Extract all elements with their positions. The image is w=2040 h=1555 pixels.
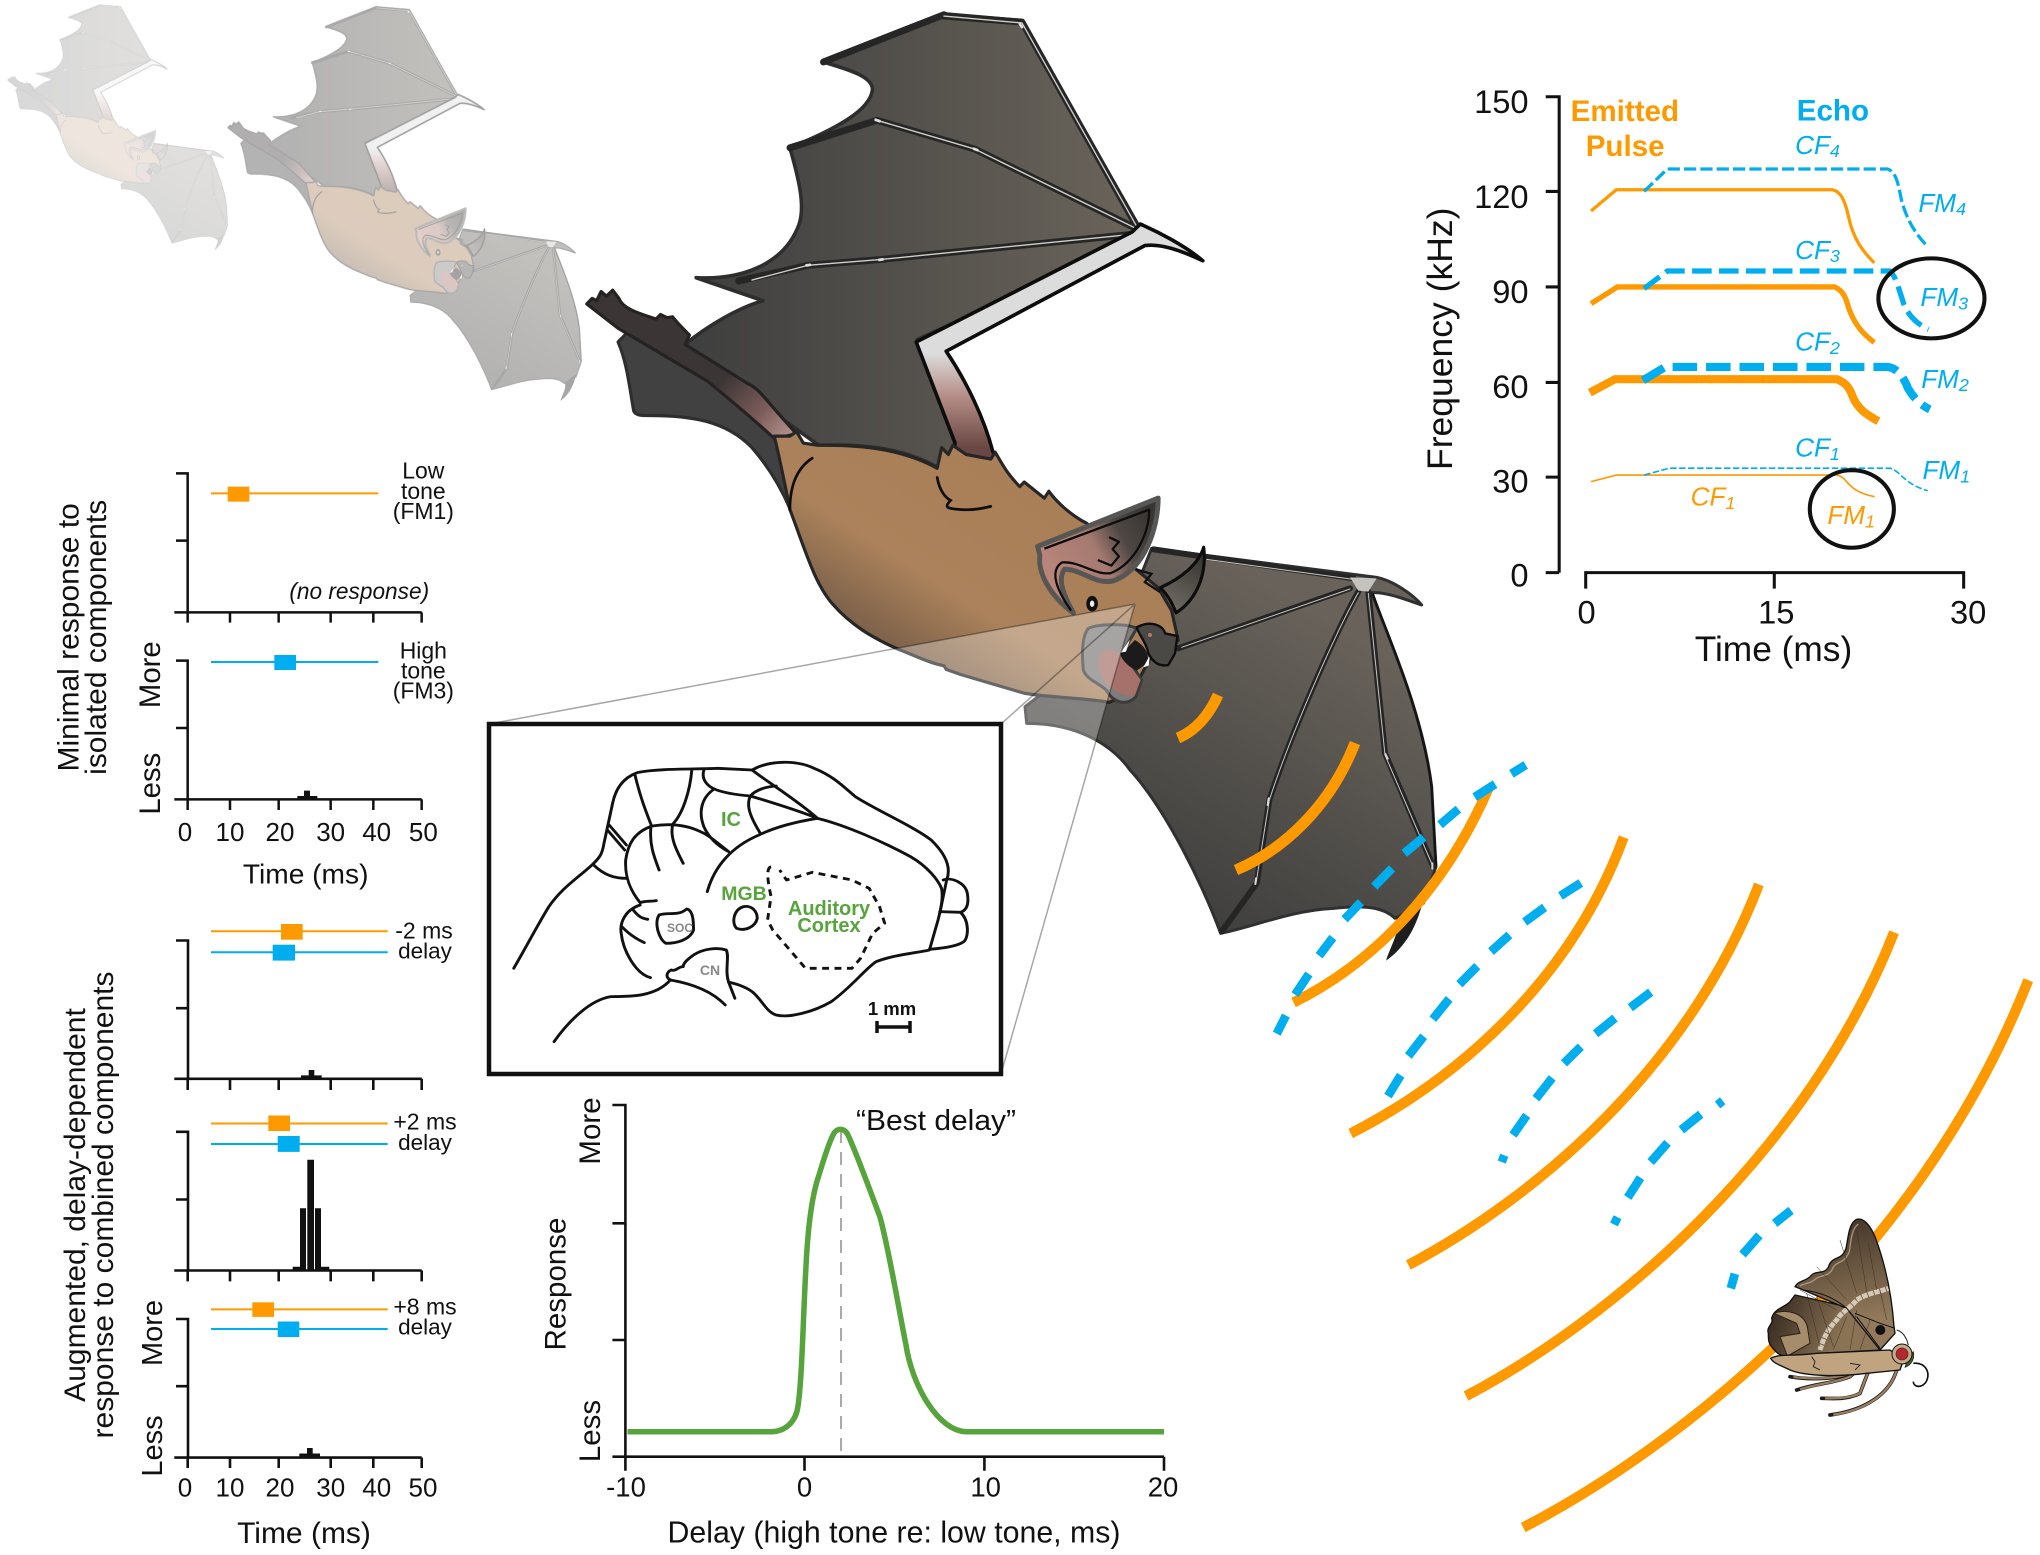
tuning tick labels: 10 <box>970 1472 1001 1503</box>
raster: +8 ms delay <box>137 1293 457 1477</box>
brain inset panel: Cortex <box>797 915 861 937</box>
scale bar <box>868 998 916 1033</box>
echo wavefronts <box>1277 765 1791 1288</box>
moth hindwing <box>1768 1295 1880 1357</box>
time axis labels: 10 <box>216 817 244 847</box>
harmonic labels: CF <box>1795 327 1830 357</box>
y tick labels: 0 <box>1510 557 1529 594</box>
panel: augmented delay-dependent response <box>59 917 457 1550</box>
tuning axis titles: Delay (high tone re: low tone, ms) <box>668 1517 1120 1550</box>
main bat illustration <box>587 14 1436 961</box>
panel: best delay tuning curve <box>540 1097 1178 1550</box>
time axis labels: 30 <box>316 817 345 847</box>
raster: low tone: (no response) <box>289 578 429 604</box>
scale bar: 1 mm <box>868 998 916 1019</box>
mouth and nose <box>1082 624 1177 702</box>
harmonic labels: 2 <box>1958 375 1969 395</box>
moth proboscis <box>1913 1363 1928 1386</box>
tuning axes <box>612 1105 1164 1471</box>
lower wing <box>1025 548 1436 961</box>
tuning tick labels: 20 <box>1148 1472 1178 1503</box>
raster: -2 ms delay <box>174 917 453 1090</box>
raster: high tone: Less <box>134 753 167 815</box>
harmonic labels: 1 <box>1830 444 1840 464</box>
harmonic labels: CF <box>1691 482 1725 512</box>
raster: low tone <box>174 457 454 623</box>
panel title: Augmented, delay-dependent <box>59 1008 92 1402</box>
harmonic labels: 3 <box>1958 293 1968 313</box>
time axis labels: 0 <box>178 817 192 847</box>
brain inset panel: CN <box>700 962 720 978</box>
time axis labels: Time (ms) <box>237 1517 371 1550</box>
upper wing and body <box>587 14 1204 702</box>
y tick labels: 90 <box>1492 273 1529 310</box>
raster: +8 ms delay: +8 ms <box>393 1293 457 1319</box>
x tick labels: 30 <box>1950 593 1986 630</box>
body <box>774 432 1178 702</box>
chart axes <box>1546 97 1964 589</box>
emitted pulse wavefronts <box>1178 695 2028 1527</box>
best delay label: “Best delay” <box>856 1105 1016 1137</box>
tuning axis titles <box>540 1097 1120 1550</box>
panel: minimal response to isolated components <box>52 457 454 889</box>
fur tuft <box>1136 569 1160 592</box>
raster: low tone: Low <box>402 457 445 483</box>
raster: high tone: tone <box>401 657 446 683</box>
raster: +8 ms delay: More <box>137 1300 169 1366</box>
harmonic labels: FM <box>1922 455 1960 485</box>
brain inset panel: SOC <box>667 921 693 935</box>
harmonic labels: 1 <box>1960 466 1970 486</box>
raster: high tone: More <box>134 641 167 708</box>
x tick labels <box>1577 593 1986 630</box>
time axis labels: 30 <box>316 1472 345 1502</box>
brain labels: IC <box>721 809 741 831</box>
x axis title: Time (ms) <box>1695 630 1852 669</box>
raster: +2 ms delay: +2 ms <box>393 1109 457 1135</box>
time axis labels: 10 <box>216 1472 244 1502</box>
tuning tick labels: 0 <box>797 1472 812 1503</box>
harmonic labels <box>1691 130 1970 531</box>
time axis labels: 50 <box>409 817 438 847</box>
emitted pulse traces <box>1590 190 1878 497</box>
harmonic labels: 1 <box>1865 511 1875 531</box>
harmonic labels: 2 <box>1829 338 1840 358</box>
harmonic labels: FM <box>1921 364 1959 394</box>
x tick labels: 15 <box>1758 593 1794 630</box>
y tick labels: 60 <box>1492 368 1529 405</box>
chart legend headings: Echo <box>1797 94 1869 127</box>
chart legend headings: Pulse <box>1586 130 1665 163</box>
tuning tick labels: -10 <box>606 1472 646 1503</box>
y axis title: Frequency (kHz) <box>1420 208 1460 470</box>
raster: +8 ms delay: Less <box>137 1415 169 1477</box>
harmonic labels: CF <box>1795 130 1830 160</box>
chart legend headings <box>1571 94 1869 163</box>
harmonic labels: 3 <box>1830 246 1840 266</box>
tuning axis titles: Less <box>574 1400 607 1462</box>
chart legend headings: Emitted <box>1571 95 1679 128</box>
time axis labels: 0 <box>178 1472 192 1502</box>
brain inset panel <box>489 724 1001 1074</box>
raster: -2 ms delay: delay <box>398 938 453 964</box>
harmonic labels: FM <box>1827 500 1865 530</box>
brain inset panel: Auditory <box>788 898 871 920</box>
raster: high tone <box>134 637 454 815</box>
ghost bat: earlier position <box>8 5 228 250</box>
time axis labels: 40 <box>362 817 391 847</box>
time axis labels: 20 <box>266 817 294 847</box>
far ear <box>1160 547 1204 613</box>
raster: low tone: tone <box>401 478 446 504</box>
y tick labels: 150 <box>1474 83 1529 120</box>
leg and foot <box>587 290 797 438</box>
raster: low tone: (FM1) <box>393 498 454 524</box>
panel title: Minimal response to <box>52 503 85 771</box>
time axis labels <box>178 1472 437 1550</box>
highlight circles <box>1810 258 1984 548</box>
time axis labels: 50 <box>409 1472 437 1502</box>
moth eye <box>1896 1348 1908 1360</box>
ghost bat: middle position <box>228 7 581 401</box>
harmonic labels: 4 <box>1956 199 1966 219</box>
y tick labels: 30 <box>1492 463 1529 500</box>
tuning axis titles: More <box>574 1097 607 1165</box>
raster: high tone: High <box>400 637 447 663</box>
y tick labels: 120 <box>1474 178 1529 215</box>
raster: +2 ms delay: delay <box>398 1130 453 1155</box>
echo traces <box>1643 169 1930 491</box>
harmonic labels: FM <box>1920 282 1958 312</box>
panel title <box>52 500 113 775</box>
harmonic labels: CF <box>1795 433 1830 463</box>
near ear <box>1038 498 1158 613</box>
moth legs <box>1790 1358 1897 1415</box>
brain outline <box>514 762 968 1042</box>
time axis labels: 40 <box>362 1472 391 1502</box>
raster: +8 ms delay: delay <box>398 1314 453 1339</box>
moth forewing <box>1795 1219 1895 1350</box>
panel title: isolated components <box>80 500 113 775</box>
panel title: response to combined components <box>87 972 120 1438</box>
time axis labels <box>178 817 438 889</box>
harmonic labels: CF <box>1795 235 1830 265</box>
harmonic labels: 1 <box>1725 493 1735 513</box>
x tick labels: 0 <box>1577 593 1596 630</box>
harmonic labels: 4 <box>1830 141 1840 161</box>
moth body <box>1771 1350 1903 1376</box>
raster: -2 ms delay: -2 ms <box>395 917 453 943</box>
raster: +2 ms delay <box>174 1109 457 1281</box>
panel title <box>59 972 120 1438</box>
harmonic labels: FM <box>1918 188 1956 218</box>
eye <box>1086 596 1098 612</box>
raster: high tone: (FM3) <box>393 677 454 703</box>
y tick labels <box>1474 83 1529 594</box>
frequency-time chart <box>1420 83 1986 669</box>
zoom projection from bat head to brain inset <box>489 604 1135 1074</box>
time axis labels: 20 <box>266 1472 294 1502</box>
best delay marker <box>840 1130 842 1457</box>
tuning tick labels <box>606 1472 1178 1503</box>
tuning curve <box>628 1129 1164 1432</box>
tuning axis titles: Response <box>540 1218 572 1350</box>
time axis labels: Time (ms) <box>243 858 368 889</box>
arm <box>916 224 1203 466</box>
moth <box>1768 1219 1928 1415</box>
brain inset panel: MGB <box>721 883 767 905</box>
